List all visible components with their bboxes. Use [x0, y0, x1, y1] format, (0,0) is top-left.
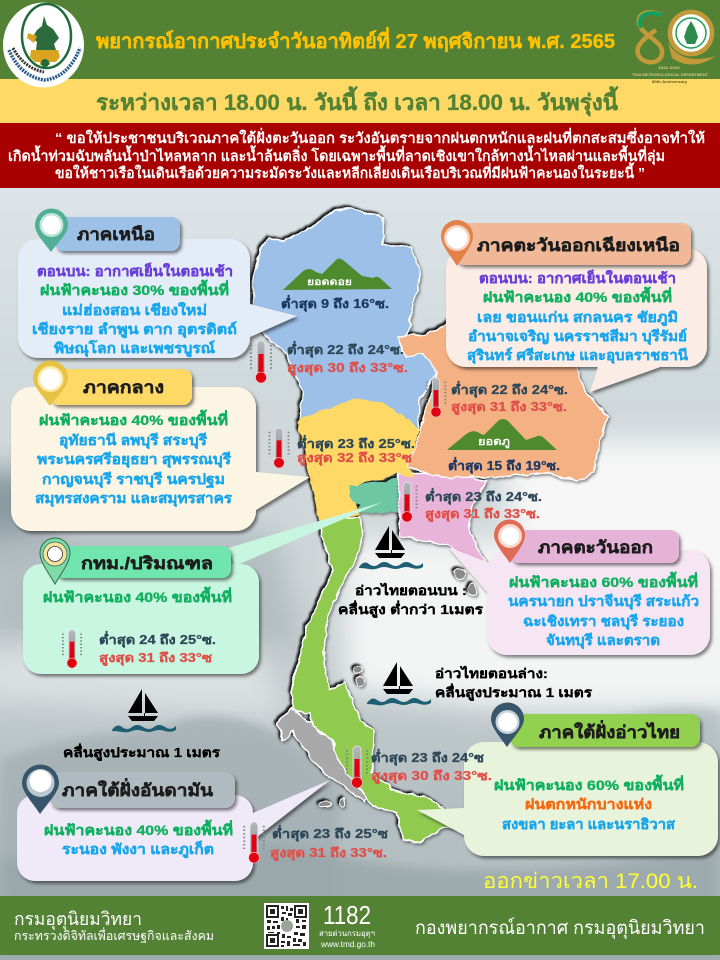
temperature: north: สูงสุด 30 ถึง 33°ซ.: [287, 361, 408, 376]
temperature: Andaman: สูงสุด 31 ถึง 33°ซ.: [270, 846, 387, 861]
temperature: north peak: ต่ำสุด 9 ถึง 16°ซ.: [281, 295, 389, 312]
text: north: ตอนบน: อากาศเย็นในตอนเช้า: [37, 262, 233, 279]
temperature: north: [287, 341, 408, 376]
header band: [0, 0, 720, 79]
text: south gulf: ฝนตกหนักบางแห่ง: [525, 796, 652, 812]
map region: north: [253, 208, 437, 430]
text: upper gulf waves: คลื่นสูง ต่ำกว่า 1เมตร: [338, 600, 483, 618]
title: พยากรณ์อากาศประจำวันอาทิตย์ที่ 27 พฤศจิกายน พ.ศ. 2565: [96, 26, 615, 53]
heading: east: [494, 520, 679, 563]
warning band: “ ขอให้ประชาชนบริเวณภาคใต้ฝั่งตะวันออก ระวังอันตรายจากฝนตกหนักและฝนที่ตกสะสมซึ่งอาจทำให้: [55, 127, 705, 147]
text: northeast: เลย ขอนแก่น สกลนคร ชัยภูมิ: [477, 309, 678, 326]
callout: central: [11, 360, 310, 531]
map region: south: [277, 708, 374, 802]
text: Andaman: [44, 819, 233, 858]
hotline: [319, 900, 375, 949]
text: north: เชียงราย ลำพูน ตาก อุตรดิตถ์: [32, 321, 237, 338]
temperature: Bangkok: ต่ำสุด 24 ถึง 25°ซ.: [99, 631, 216, 648]
text: north: แม่ฮ่องสอน เชียงใหม่: [62, 301, 207, 318]
text: east: ฉะเชิงเทรา ชลบุรี ระยอง: [523, 613, 684, 630]
temperature: Bangkok: [99, 631, 216, 666]
icon: boat Andaman: [112, 689, 176, 732]
text: central: [35, 409, 233, 507]
text: Bangkok: ฝนฟ้าคะนอง 40% ของพื้นที่: [43, 586, 232, 605]
icon: thermometer central: [269, 428, 289, 468]
map region: east: [398, 473, 490, 570]
temperature: east: [425, 488, 542, 522]
warning band: ขอให้ชาวเรือในเดินเรือด้วยความระมัดระวังและหลีกเลี่ยงเดินเรือบริเวณที่มีฝนฟ้าคะนองในระยะนี้ ”: [55, 162, 645, 182]
icon: ministry logo: [3, 2, 84, 88]
heading: Andaman: ภาคใต้ฝั่งอันดามัน: [62, 778, 213, 800]
text: northeast: ตอนบน: อากาศเย็นในตอนเช้า: [479, 269, 676, 286]
icon: thermometer east: [397, 482, 417, 522]
heading: Bangkok: กทม./ปริมณฑล: [81, 554, 213, 573]
temperature: south gulf: สูงสุด 30 ถึง 33°ซ.: [371, 769, 492, 784]
heading: north: ภาคเหนือ: [77, 224, 155, 244]
text: north: พิษณุโลก และเพชรบูรณ์: [54, 339, 215, 357]
icon: 80th anniversary logo: [632, 12, 716, 84]
text: east: ฝนฟ้าคะนอง 60% ของพื้นที่: [509, 571, 698, 590]
icon: 80th anniversary logo: 80th Anniversary: [652, 80, 687, 84]
warning band: [0, 123, 720, 188]
temperature: Andaman: ต่ำสุด 23 ถึง 25°ซ: [272, 825, 389, 842]
text: north: ฝนฟ้าคะนอง 30% ของพื้นที่: [40, 279, 229, 298]
temperature: south gulf: ต่ำสุด 23 ถึง 24°ซ: [371, 749, 485, 766]
heading: east: ภาคตะวันออก: [538, 538, 653, 557]
subtitle band: ระหว่างเวลา 18.00 น. วันนี้ ถึง เวลา 18.00 น. วันพรุ่งนี้: [96, 86, 619, 117]
text: central: พระนครศรีอยุธยา สุพรรณบุรี: [37, 451, 232, 468]
icon: 80th anniversary logo: THAI METEOROLOGICAL DEPARTMENT: [632, 73, 709, 77]
hotline: สายด่วนกรมอุตุฯ: [319, 929, 375, 938]
text: Andaman: ฝนฟ้าคะนอง 40% ของพื้นที่: [44, 819, 233, 838]
text: upper gulf waves: อ่าวไทยตอนบน :: [355, 582, 467, 598]
text: northeast: [467, 269, 688, 364]
temperature: east: สูงสุด 31 ถึง 33°ซ.: [425, 507, 540, 522]
icon: 80th anniversary logo: 1942-2022: [658, 66, 680, 70]
icon: boat upper gulf: [359, 526, 423, 569]
text: south gulf: ฝนฟ้าคะนอง 60% ของพื้นที่: [494, 774, 684, 793]
heading: central: ภาคกลาง: [83, 378, 164, 397]
text: east: [508, 571, 699, 649]
text: east: นครนายก ปราจีนบุรี สระแก้ว: [508, 593, 699, 610]
icon: boat lower gulf: [367, 662, 431, 705]
icon: thermometer north: [251, 341, 271, 383]
text: Andaman: ระนอง พังงา และภูเก็ต: [62, 840, 214, 858]
peak: northeast mountain: [447, 419, 557, 450]
callout: east: [448, 520, 710, 655]
icon: thermometer Andaman: [244, 822, 264, 863]
peak: northeast mountain: ยอดภู: [478, 436, 510, 449]
text: north: [32, 262, 237, 357]
heading: Bangkok: [40, 538, 231, 584]
map region: islands: [320, 568, 476, 808]
text: upper gulf waves: [338, 582, 483, 618]
callout: south gulf: [417, 703, 718, 856]
map region: northeast: [397, 308, 607, 481]
heading: south gulf: ภาคใต้ฝั่งอ่าวไทย: [539, 720, 680, 742]
heading: northeast: ภาคตะวันออกเฉียงเหนือ: [477, 235, 680, 255]
text: lower gulf waves: อ่าวไทยตอนล่าง:: [435, 665, 548, 681]
text: Andaman waves: คลื่นสูงประมาณ 1 เมตร: [63, 743, 220, 761]
hotline: 1182: [323, 900, 371, 930]
icon: QR code: [264, 903, 309, 949]
text: central: ฝนฟ้าคะนอง 40% ของพื้นที่: [39, 409, 228, 428]
hotline: www.tmd.go.th: [320, 940, 375, 949]
peak: north mountain: [283, 258, 392, 290]
temperature: east: ต่ำสุด 23 ถึง 24°ซ.: [425, 488, 542, 505]
icon: thermometer Bangkok: [63, 630, 81, 668]
map region: central: [297, 398, 418, 522]
temperature: north: ต่ำสุด 22 ถึง 24°ซ.: [287, 341, 404, 358]
text: central: สมุทรสงคราม และสมุทรสาคร: [35, 490, 233, 507]
icon: thermometer northeast: [427, 378, 445, 417]
text: central: กาญจนบุรี ราชบุรี นครปฐม: [42, 471, 225, 489]
heading: Andaman: [22, 764, 235, 814]
text: central: อุทัยธานี ลพบุรี สระบุรี: [59, 432, 208, 449]
department name: กรมอุตุนิยมวิทยา: [14, 909, 142, 930]
temperature: Andaman: [270, 825, 389, 861]
heading: north: [35, 209, 180, 252]
text: northeast: อำนาจเจริญ นครราชสีมา บุรีรัมย์: [468, 328, 687, 345]
warning band: เกิดน้ำท่วมฉับพลันน้ำป่าไหลหลาก และน้ำล้นตลิ่ง โดยเฉพาะพื้นที่ลาดเชิงเขาใกล้ทางน้ำไหลผ่านและพื้นที่ลุ่ม: [8, 145, 665, 165]
text: south gulf: สงขลา ยะลา และนราธิวาส: [502, 816, 675, 832]
temperature: northeast: สูงสุด 31 ถึง 33°ซ.: [451, 400, 567, 415]
temperature: central: ต่ำสุด 23 ถึง 25°ซ.: [297, 435, 415, 452]
forecast bureau: กองพยากรณ์อากาศ กรมอุตุนิยมวิทยา: [415, 917, 705, 940]
temperature: south gulf: [371, 749, 492, 784]
text: east: จันทบุรี และตราด: [546, 632, 660, 649]
subtitle band: [0, 79, 720, 123]
icon: thermometer south gulf: [347, 746, 367, 788]
map of Thailand: [253, 208, 607, 843]
callout: northeast: [441, 220, 707, 392]
map region: Bangkok: [350, 478, 398, 513]
footer: [0, 896, 720, 955]
text: northeast: ฝนฟ้าคะนอง 40% ของพื้นที่: [483, 286, 672, 305]
issue time: ออกข่าวเวลา 17.00 น.: [483, 870, 698, 893]
temperature: northeast peak: ต่ำสุด 15 ถึง 19°ซ.: [448, 457, 560, 474]
text: northeast: สุรินทร์ ศรีสะเกษ และอุบลราชธานี: [467, 347, 688, 364]
heading: northeast: [441, 220, 691, 266]
temperature: central: [297, 435, 415, 466]
text: lower gulf waves: [435, 665, 592, 701]
heading: south gulf: [491, 703, 700, 747]
peak: north mountain: ยอดดอย: [307, 277, 352, 288]
temperature: northeast: [451, 381, 568, 415]
temperature: northeast: ต่ำสุด 22 ถึง 24°ซ.: [451, 381, 568, 398]
callout: Andaman: [17, 764, 330, 881]
heading: central: [33, 360, 192, 406]
department name: [14, 909, 214, 943]
text: south gulf: [494, 774, 684, 832]
temperature: central: สูงสุด 32 ถึง 33°ซ: [297, 451, 413, 466]
temperature: Bangkok: สูงสุด 31 ถึง 33°ซ: [99, 651, 213, 666]
callout: Bangkok: [23, 502, 383, 674]
text: lower gulf waves: คลื่นสูงประมาณ 1 เมตร: [435, 683, 592, 701]
callout: north: [18, 209, 297, 358]
department name: กระทรวงดิจิทัลเพื่อเศรษฐกิจและสังคม: [14, 927, 214, 943]
